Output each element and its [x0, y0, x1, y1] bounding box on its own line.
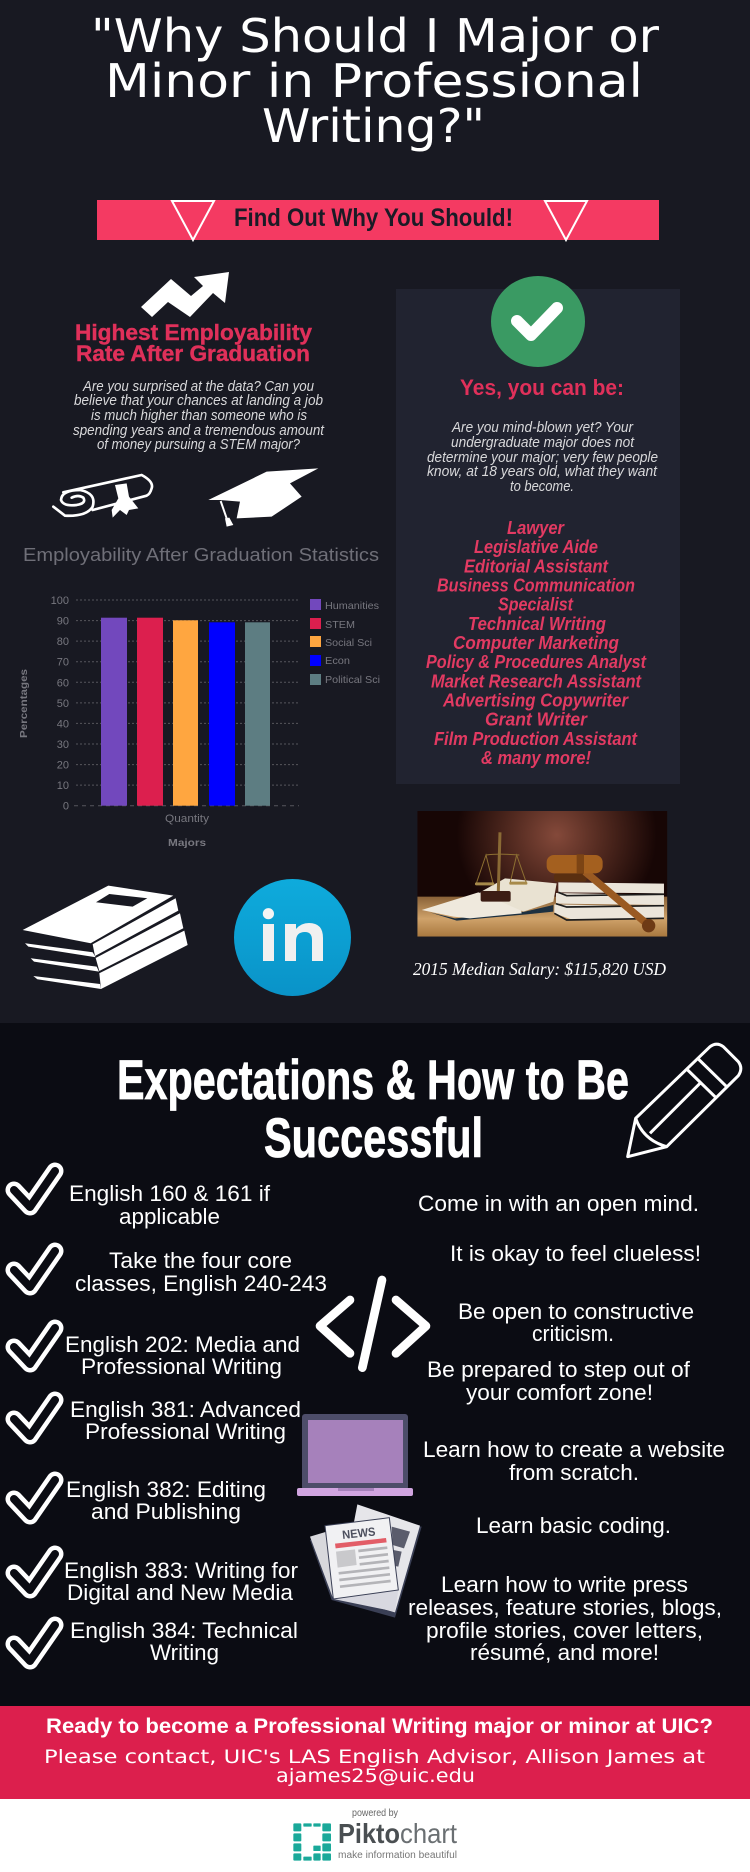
list: expectations: from scratch.	[509, 1460, 639, 1485]
title	[91, 9, 659, 153]
list: careers: Editorial Assistant	[464, 556, 609, 576]
heading: highest employability: Rate After Graduation	[76, 341, 310, 366]
heading: yes you can be: Yes, you can be:	[460, 375, 624, 400]
list: required courses: Professional Writing	[81, 1354, 282, 1379]
icon: left triangle	[172, 201, 214, 240]
y axis labels: 20	[57, 760, 69, 772]
title: Writing?"	[262, 99, 485, 153]
list: careers: Film Production Assistant	[434, 729, 638, 749]
footer contact: Please contact, UIC's LAS English Advisor, Allison James at	[44, 1746, 705, 1768]
y axis labels	[51, 595, 69, 813]
footer contact	[44, 1746, 705, 1787]
list: expectations: Be prepared to step out of	[427, 1357, 691, 1382]
heading: highest employability	[75, 320, 313, 366]
list: expectations: It is okay to feel clueless!	[450, 1241, 701, 1266]
text: mind-blown: Are you mind-blown yet? Your	[451, 419, 634, 436]
legend: Humanities	[325, 600, 379, 612]
text: are you surprised: Are you surprised at the data? Can you	[82, 378, 315, 395]
icon: right triangle	[545, 201, 587, 240]
icon: newspaper	[310, 1504, 422, 1618]
list: required courses: English 160 & 161 if	[69, 1181, 271, 1206]
title: Minor in Professional	[105, 54, 643, 108]
list: expectations: releases, feature stories, blogs,	[408, 1595, 722, 1620]
list: expectations: Learn how to write press	[441, 1572, 688, 1597]
list: required courses: English 382: Editing	[66, 1477, 266, 1502]
x axis title: Majors	[168, 837, 206, 849]
list: expectations: Come in with an open mind.	[418, 1191, 699, 1216]
y axis labels: 40	[57, 718, 69, 730]
caption: median salary: 2015 Median Salary: $115,820 USD	[413, 959, 666, 979]
icon: newspaper: NEWS	[342, 1525, 376, 1542]
list: careers: Grant Writer	[485, 710, 588, 730]
text: mind-blown: undergraduate major does not	[451, 434, 635, 451]
list: careers: Advertising Copywriter	[442, 690, 629, 710]
y axis labels: 70	[57, 657, 69, 669]
y axis labels: 30	[57, 739, 69, 751]
text: are you surprised: believe that your chances at landing a job	[74, 392, 323, 409]
logo wordmark	[338, 1818, 457, 1861]
list: careers: Business Communication	[437, 576, 635, 596]
text: mind-blown	[427, 419, 658, 495]
icon: linkedin	[234, 879, 351, 996]
background: lower section	[0, 1023, 750, 1706]
legend: Political Sci	[325, 674, 380, 686]
list: required courses	[64, 1181, 327, 1665]
text: are you surprised	[73, 378, 325, 453]
text: are you surprised: spending years and a tremendous amount	[73, 422, 325, 439]
heading: expectations	[117, 1048, 629, 1169]
list: expectations	[408, 1191, 725, 1665]
list: required courses: and Publishing	[91, 1499, 241, 1524]
y axis title: Percentages	[18, 669, 30, 738]
footer white strip	[0, 1799, 750, 1872]
list: required courses: Professional Writing	[85, 1419, 286, 1444]
piktochart logo: powered by	[352, 1808, 398, 1819]
list: required courses: Writing	[150, 1640, 219, 1665]
list: required courses: Digital and New Media	[67, 1580, 293, 1605]
piktochart logo	[293, 1808, 457, 1861]
logo wordmark: Pikto	[338, 1818, 400, 1849]
background: upper section	[0, 0, 750, 1023]
y axis labels: 50	[57, 698, 69, 710]
y axis labels: 10	[57, 780, 69, 792]
icon: pencil	[628, 1044, 741, 1157]
banner: find out why	[97, 200, 659, 240]
list: careers: & many more!	[481, 748, 591, 768]
heading: highest employability: Highest Employability	[75, 320, 313, 345]
list: expectations: résumé, and more!	[470, 1640, 659, 1665]
legend: STEM	[325, 619, 355, 631]
list: required courses: English 383: Writing for	[64, 1558, 299, 1583]
logo wordmark: chart	[400, 1818, 457, 1849]
image: gavel, scales and books	[417, 811, 667, 937]
list: careers: Policy & Procedures Analyst	[426, 652, 647, 672]
text: mind-blown: to become.	[510, 478, 574, 495]
text: mind-blown: determine your major; very few people	[427, 449, 658, 466]
icon: green check	[491, 276, 585, 367]
title: "Why Should I Major or	[91, 9, 659, 63]
logo wordmark: make information beautiful	[338, 1850, 457, 1861]
panel: yes you can be	[396, 276, 680, 784]
y axis labels: 60	[57, 677, 69, 689]
legend: Social Sci	[325, 637, 372, 649]
text: mind-blown: know, at 18 years old, what they want	[427, 463, 658, 480]
icon: diploma	[53, 475, 152, 518]
icon: rising arrow	[141, 272, 229, 317]
list: expectations: Learn how to create a website	[423, 1437, 725, 1462]
banner text: Find Out Why You Should!	[234, 204, 513, 232]
list: required courses: English 384: Technical	[70, 1618, 298, 1643]
category label: Quantity	[165, 813, 210, 825]
footer call to action	[0, 1706, 750, 1799]
list: required courses: Take the four core	[109, 1248, 292, 1273]
y axis labels: 0	[63, 801, 69, 813]
list: required courses: English 202: Media and	[65, 1332, 300, 1357]
checkmarks	[14, 1171, 55, 1661]
y axis labels: 80	[57, 636, 69, 648]
icon: graduation cap	[208, 468, 318, 527]
logo icon	[293, 1823, 331, 1861]
list: careers: Market Research Assistant	[431, 671, 642, 691]
icon: code brackets	[320, 1280, 426, 1368]
list: expectations: criticism.	[532, 1321, 614, 1346]
icon: stack of books	[23, 886, 188, 989]
list: expectations: your comfort zone!	[466, 1380, 653, 1405]
list: required courses: classes, English 240-243	[75, 1271, 327, 1296]
list: expectations: Be open to constructive	[458, 1299, 694, 1324]
list: careers: Lawyer	[507, 518, 565, 538]
legend	[310, 599, 380, 686]
footer contact: ajames25@uic.edu	[276, 1765, 475, 1787]
y axis labels: 100	[51, 595, 69, 607]
list: careers: Legislative Aide	[474, 537, 598, 557]
list: expectations: profile stories, cover letters,	[426, 1618, 703, 1643]
list: required courses: English 381: Advanced	[70, 1397, 301, 1422]
chart title: Employability After Graduation Statistics	[23, 545, 379, 565]
bar chart	[18, 595, 380, 849]
y axis labels: 90	[57, 616, 69, 628]
text: are you surprised: is much higher than someone who is	[91, 407, 307, 424]
icon: laptop	[297, 1414, 413, 1496]
footer heading: Ready to become a Professional Writing major or minor at UIC?	[46, 1715, 713, 1738]
text: are you surprised: of money pursuing a STEM major?	[97, 436, 301, 453]
list: careers: Technical Writing	[468, 614, 606, 634]
legend: Econ	[325, 655, 350, 667]
list: careers	[426, 518, 647, 768]
heading: expectations: Successful	[264, 1106, 483, 1169]
bars	[101, 618, 270, 806]
list: required courses: applicable	[119, 1204, 220, 1229]
list: careers: Specialist	[498, 595, 574, 615]
list: careers: Computer Marketing	[453, 633, 619, 653]
list: expectations: Learn basic coding.	[476, 1513, 671, 1538]
